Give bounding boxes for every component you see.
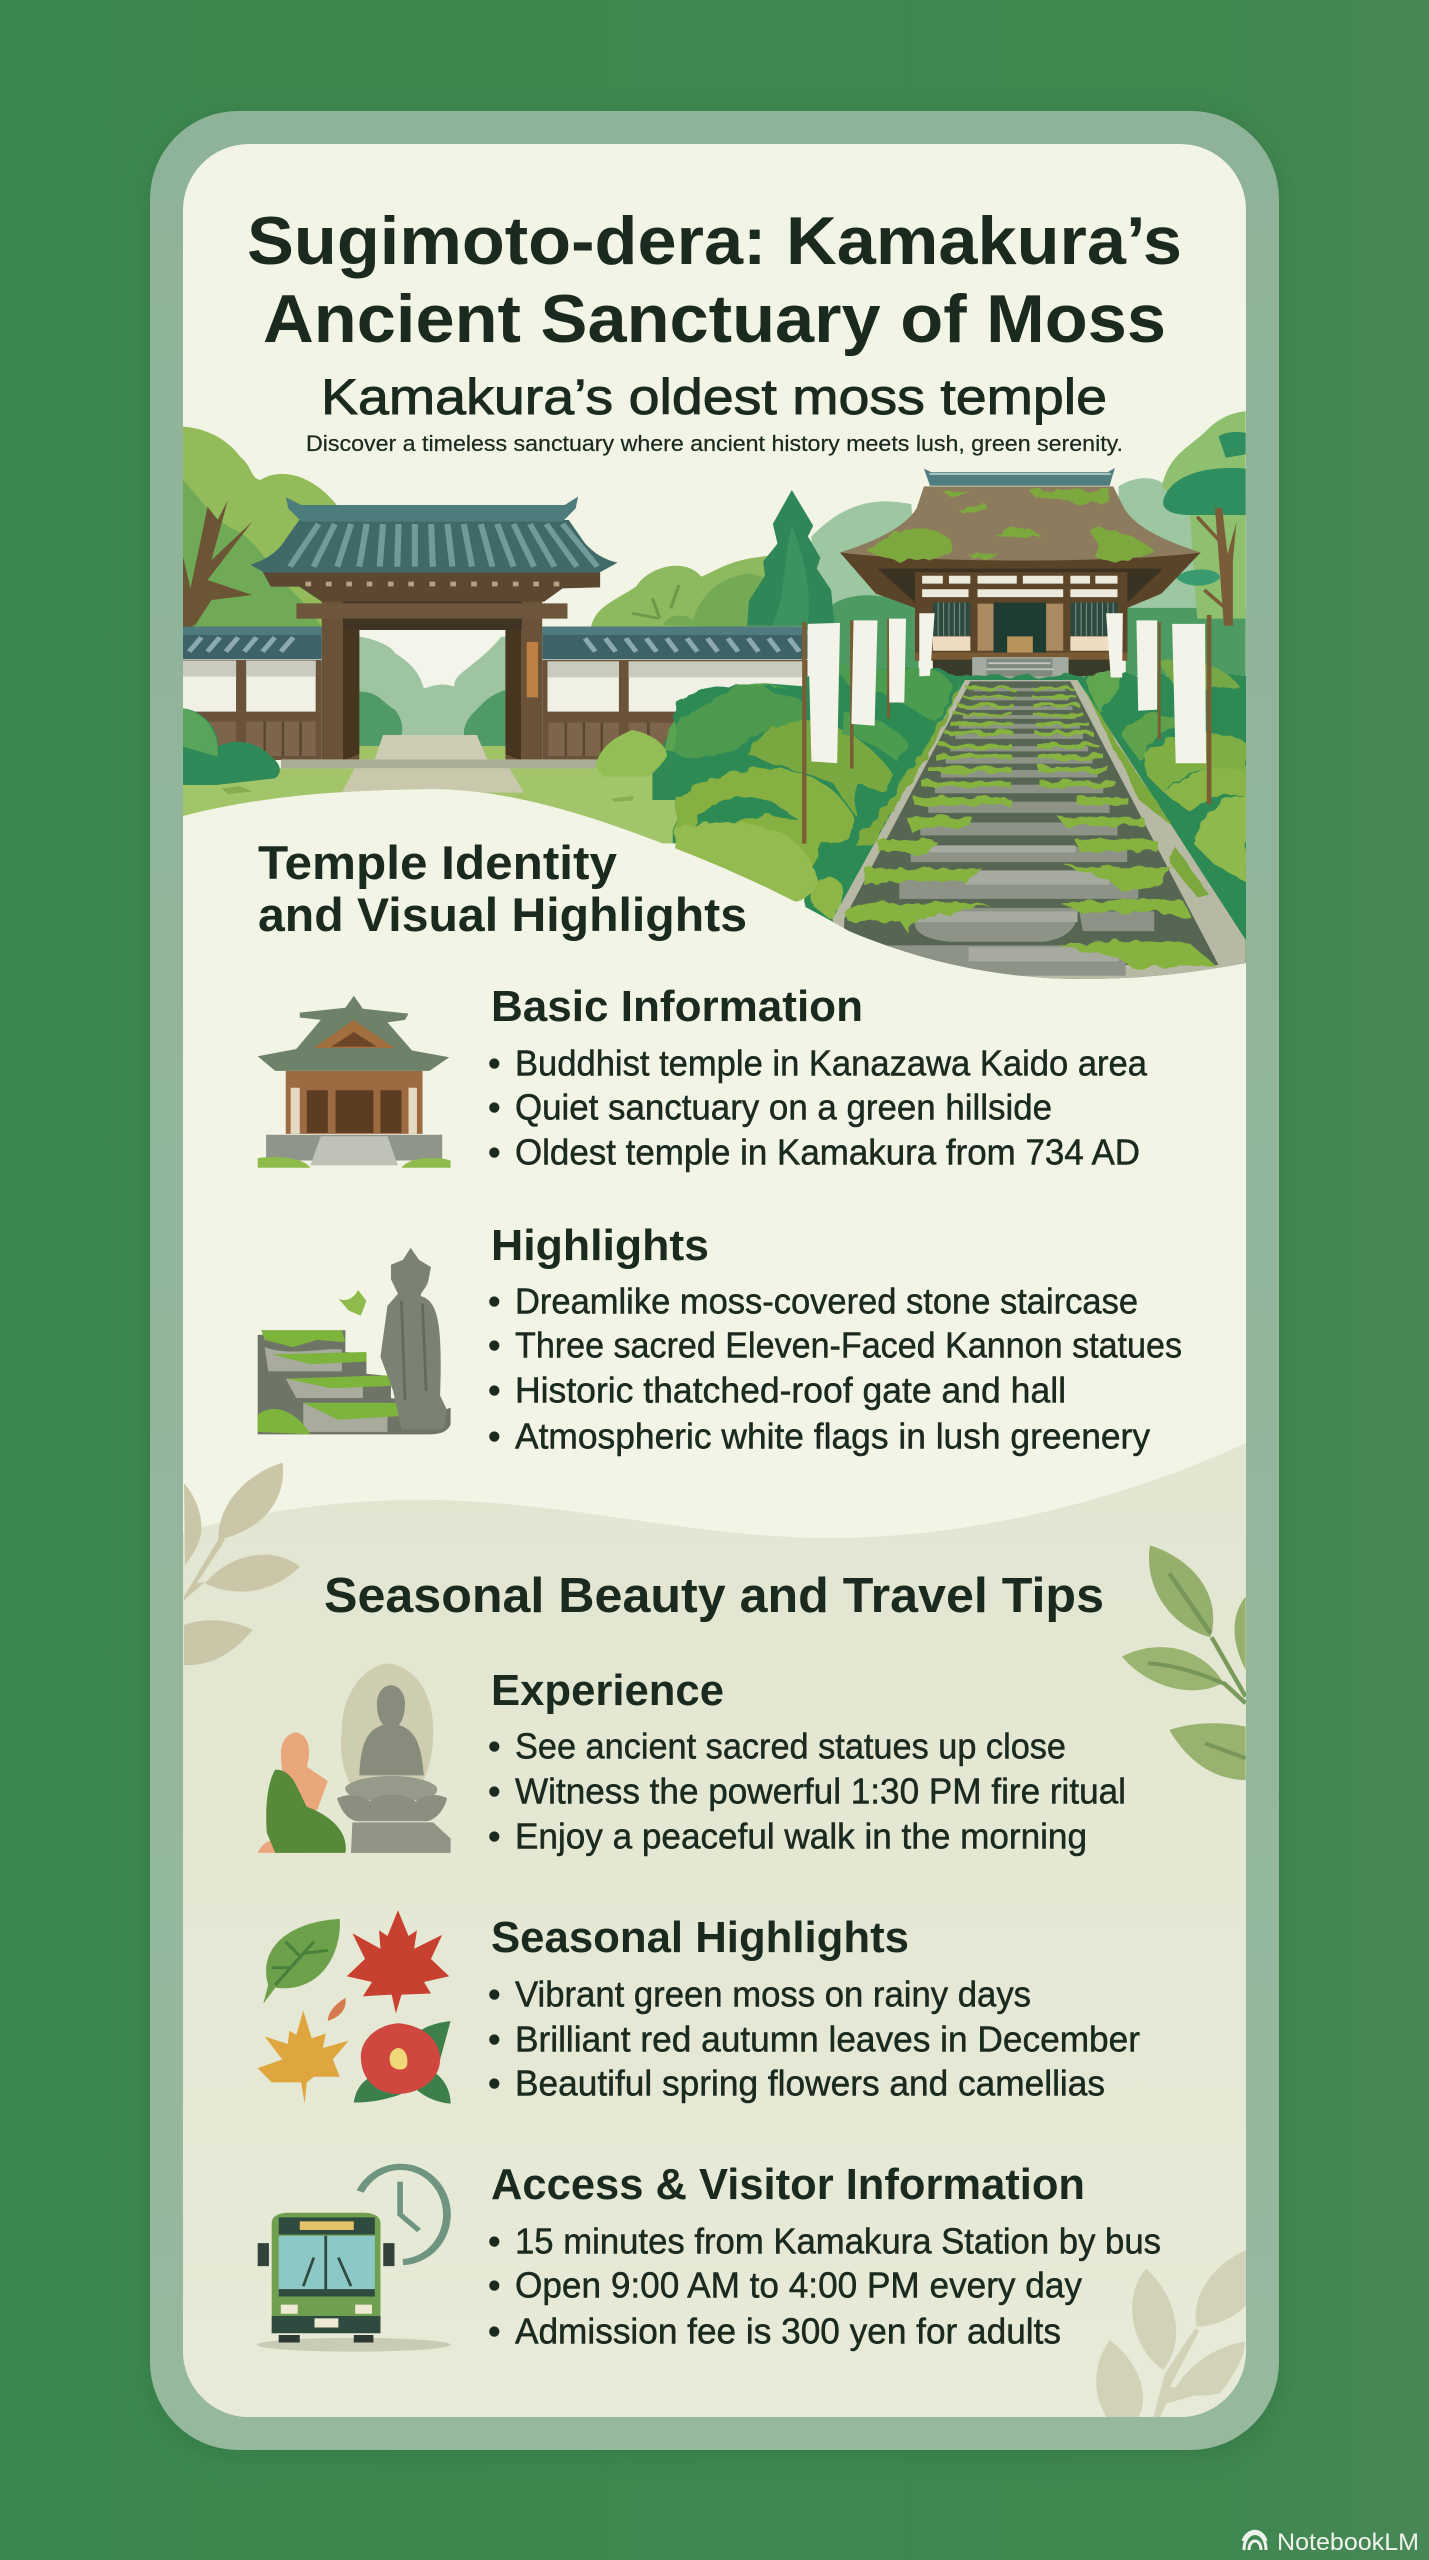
section: basic information: • (488, 1042, 501, 1084)
section: highlights: • (488, 1416, 501, 1456)
section: seasonal highlights (488, 1913, 1140, 2104)
section: seasonal highlights: Seasonal Highlights (491, 1913, 909, 1962)
section: basic information: Buddhist temple in Kanazawa Kaido area (515, 1042, 1148, 1084)
section: access and visitor information (488, 2160, 1161, 2352)
heading: seasonal beauty: Seasonal Beauty and Travel Tips (324, 1569, 1104, 1623)
heading: temple identity (258, 836, 747, 941)
panel: lower section background (183, 1443, 1247, 2417)
section: experience: • (488, 1816, 501, 1856)
section: access and visitor information: 15 minutes from Kamakura Station by bus (515, 2220, 1161, 2262)
section: seasonal highlights: • (488, 2018, 501, 2060)
gate roof (250, 520, 618, 573)
icon: bus and clock (257, 2167, 451, 2352)
tagline: Discover a timeless sanctuary where ancient history meets lush, green serenity. (306, 431, 1123, 456)
icon: left beige leaves (184, 1463, 300, 1665)
right tree (1162, 411, 1246, 619)
title: Ancient Sanctuary of Moss (263, 281, 1166, 357)
section: highlights: Highlights (491, 1221, 709, 1270)
section: access and visitor information: Admission fee is 300 yen for adults (515, 2310, 1061, 2352)
section: basic information: Basic Information (491, 982, 863, 1031)
section: highlights: Three sacred Eleven-Faced Kannon statues (515, 1324, 1182, 1366)
section: seasonal highlights: • (488, 1974, 501, 2014)
section: basic information: • (488, 1132, 501, 1172)
icon: temple (258, 996, 451, 1168)
icon: seasonal leaves and flowers (258, 1910, 451, 2104)
section: basic information: Oldest temple in Kamakura from 734 AD (515, 1132, 1140, 1172)
section: access and visitor information: • (488, 2220, 501, 2262)
ground and path (183, 768, 689, 843)
illustration: temple gate and mossy stairs scene (183, 411, 1251, 986)
section: seasonal highlights: • (488, 2062, 501, 2104)
watermark: NotebookLM: NotebookLM (1277, 2529, 1419, 2556)
moss on treads (844, 686, 1215, 969)
section: basic information: Quiet sanctuary on a green hillside (515, 1086, 1052, 1128)
section: seasonal highlights: Beautiful spring flowers and camellias (515, 2062, 1105, 2104)
gate structure (322, 587, 542, 761)
gate side: forest and gate (183, 427, 820, 843)
gate opening sky trees (359, 630, 510, 760)
section: highlights: • (488, 1370, 501, 1410)
right trees behind wall (591, 556, 808, 630)
section: access and visitor information: Open 9:00 AM to 4:00 PM every day (515, 2264, 1082, 2306)
section: seasonal highlights: Brilliant red autumn leaves in December (515, 2018, 1140, 2060)
icon: monk and buddha (258, 1663, 451, 1853)
stair (833, 680, 1246, 983)
section: highlights: Historic thatched-roof gate and hall (515, 1370, 1066, 1410)
stairs side: temple, flags and stairs (676, 411, 1251, 986)
pale background trees (811, 501, 912, 608)
heading: temple identity: Temple Identity (258, 836, 617, 889)
section: experience: • (488, 1726, 501, 1766)
temple (840, 468, 1201, 679)
section: seasonal highlights: Vibrant green moss on rainy days (515, 1974, 1031, 2014)
title (247, 203, 1182, 357)
left trees (183, 427, 342, 633)
section: highlights: Dreamlike moss-covered stone staircase (515, 1280, 1138, 1322)
section: access and visitor information: • (488, 2310, 501, 2352)
section: experience: Experience (491, 1666, 724, 1715)
section: highlights: Atmospheric white flags in lush greenery (515, 1416, 1150, 1456)
section: experience: • (488, 1770, 501, 1812)
section: highlights: • (488, 1324, 501, 1366)
title: Sugimoto-dera: Kamakura’s (247, 203, 1182, 279)
icon: right green leaves (1122, 1545, 1246, 1780)
panel: card frame (146, 111, 1283, 2458)
heading: temple identity: and Visual Highlights (258, 888, 747, 941)
pine (747, 490, 835, 626)
flags (802, 615, 1211, 844)
bushes on both sides of stairs (676, 659, 1251, 986)
section: access and visitor information: Access & Visitor Information (491, 2160, 1085, 2209)
section: experience: Witness the powerful 1:30 PM fire ritual (515, 1770, 1126, 1812)
thatched roof (840, 486, 1201, 561)
icon: bottom right beige leaves (1096, 2250, 1247, 2417)
section: basic information: • (488, 1086, 501, 1128)
section: basic information (488, 982, 1148, 1172)
section: experience (488, 1666, 1126, 1856)
section: experience: See ancient sacred statues up close (515, 1726, 1066, 1766)
right bushes (1085, 671, 1124, 711)
section: experience: Enjoy a peaceful walk in the morning (515, 1816, 1087, 1856)
walls (183, 660, 322, 760)
bushes in front of wall (183, 708, 280, 785)
section: highlights: • (488, 1280, 501, 1322)
stair stone treads (886, 688, 1154, 976)
section: access and visitor information: • (488, 2264, 501, 2306)
subtitle: Kamakura’s oldest moss temple (321, 369, 1107, 425)
icon: mossy steps and statue (258, 1248, 451, 1434)
section: highlights (488, 1221, 1182, 1456)
